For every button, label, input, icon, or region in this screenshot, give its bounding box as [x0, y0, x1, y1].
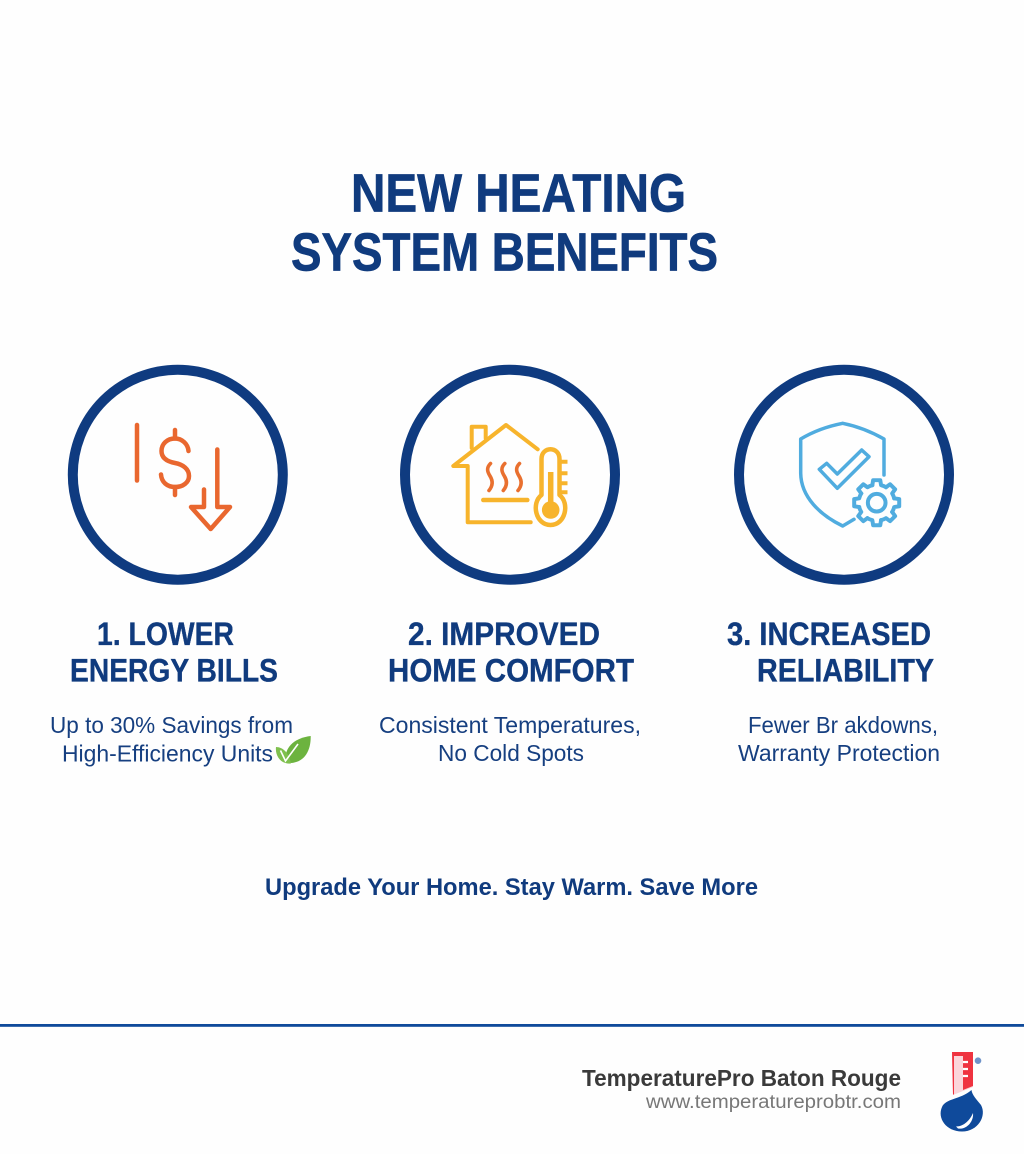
icon: dollar with down arrow in ring — [73, 370, 283, 580]
description: High-Efficiency Units — [62, 740, 273, 766]
description: Up to 30% Savings from — [50, 712, 293, 738]
icon: green leaf — [276, 736, 311, 764]
icon: house with thermometer in ring — [405, 370, 615, 580]
description — [379, 712, 641, 766]
heading: HOME COMFORT — [388, 653, 634, 689]
title: SYSTEM BENEFITS — [291, 222, 718, 282]
icon: shield with check and gear in ring — [739, 370, 949, 580]
description: Fewer Br akdowns, — [748, 712, 938, 738]
website: www.temperatureprobtr.com — [645, 1092, 901, 1113]
description — [50, 712, 293, 766]
heading: 2. IMPROVED — [408, 616, 600, 652]
description: Warranty Protection — [738, 740, 940, 766]
panel: improved home comfort — [379, 370, 641, 766]
heading: RELIABILITY — [757, 653, 934, 689]
footer — [0, 1024, 1024, 1132]
title: NEW HEATING — [351, 164, 686, 224]
panel: increased reliability — [727, 370, 949, 766]
panel: lower energy bills — [50, 370, 311, 766]
heading: ENERGY BILLS — [70, 653, 278, 689]
title — [291, 164, 718, 282]
heading — [388, 616, 634, 689]
heading: 1. LOWER — [97, 616, 234, 652]
icon: company logo — [941, 1052, 983, 1132]
description — [738, 712, 940, 766]
description: Consistent Temperatures, — [379, 712, 641, 738]
heading: 3. INCREASED — [727, 616, 931, 652]
description: No Cold Spots — [438, 740, 584, 766]
tagline: Upgrade Your Home. Stay Warm. Save More — [265, 874, 758, 901]
company name: TemperaturePro Baton Rouge — [582, 1065, 901, 1091]
heading — [70, 616, 278, 689]
heading — [727, 616, 934, 689]
